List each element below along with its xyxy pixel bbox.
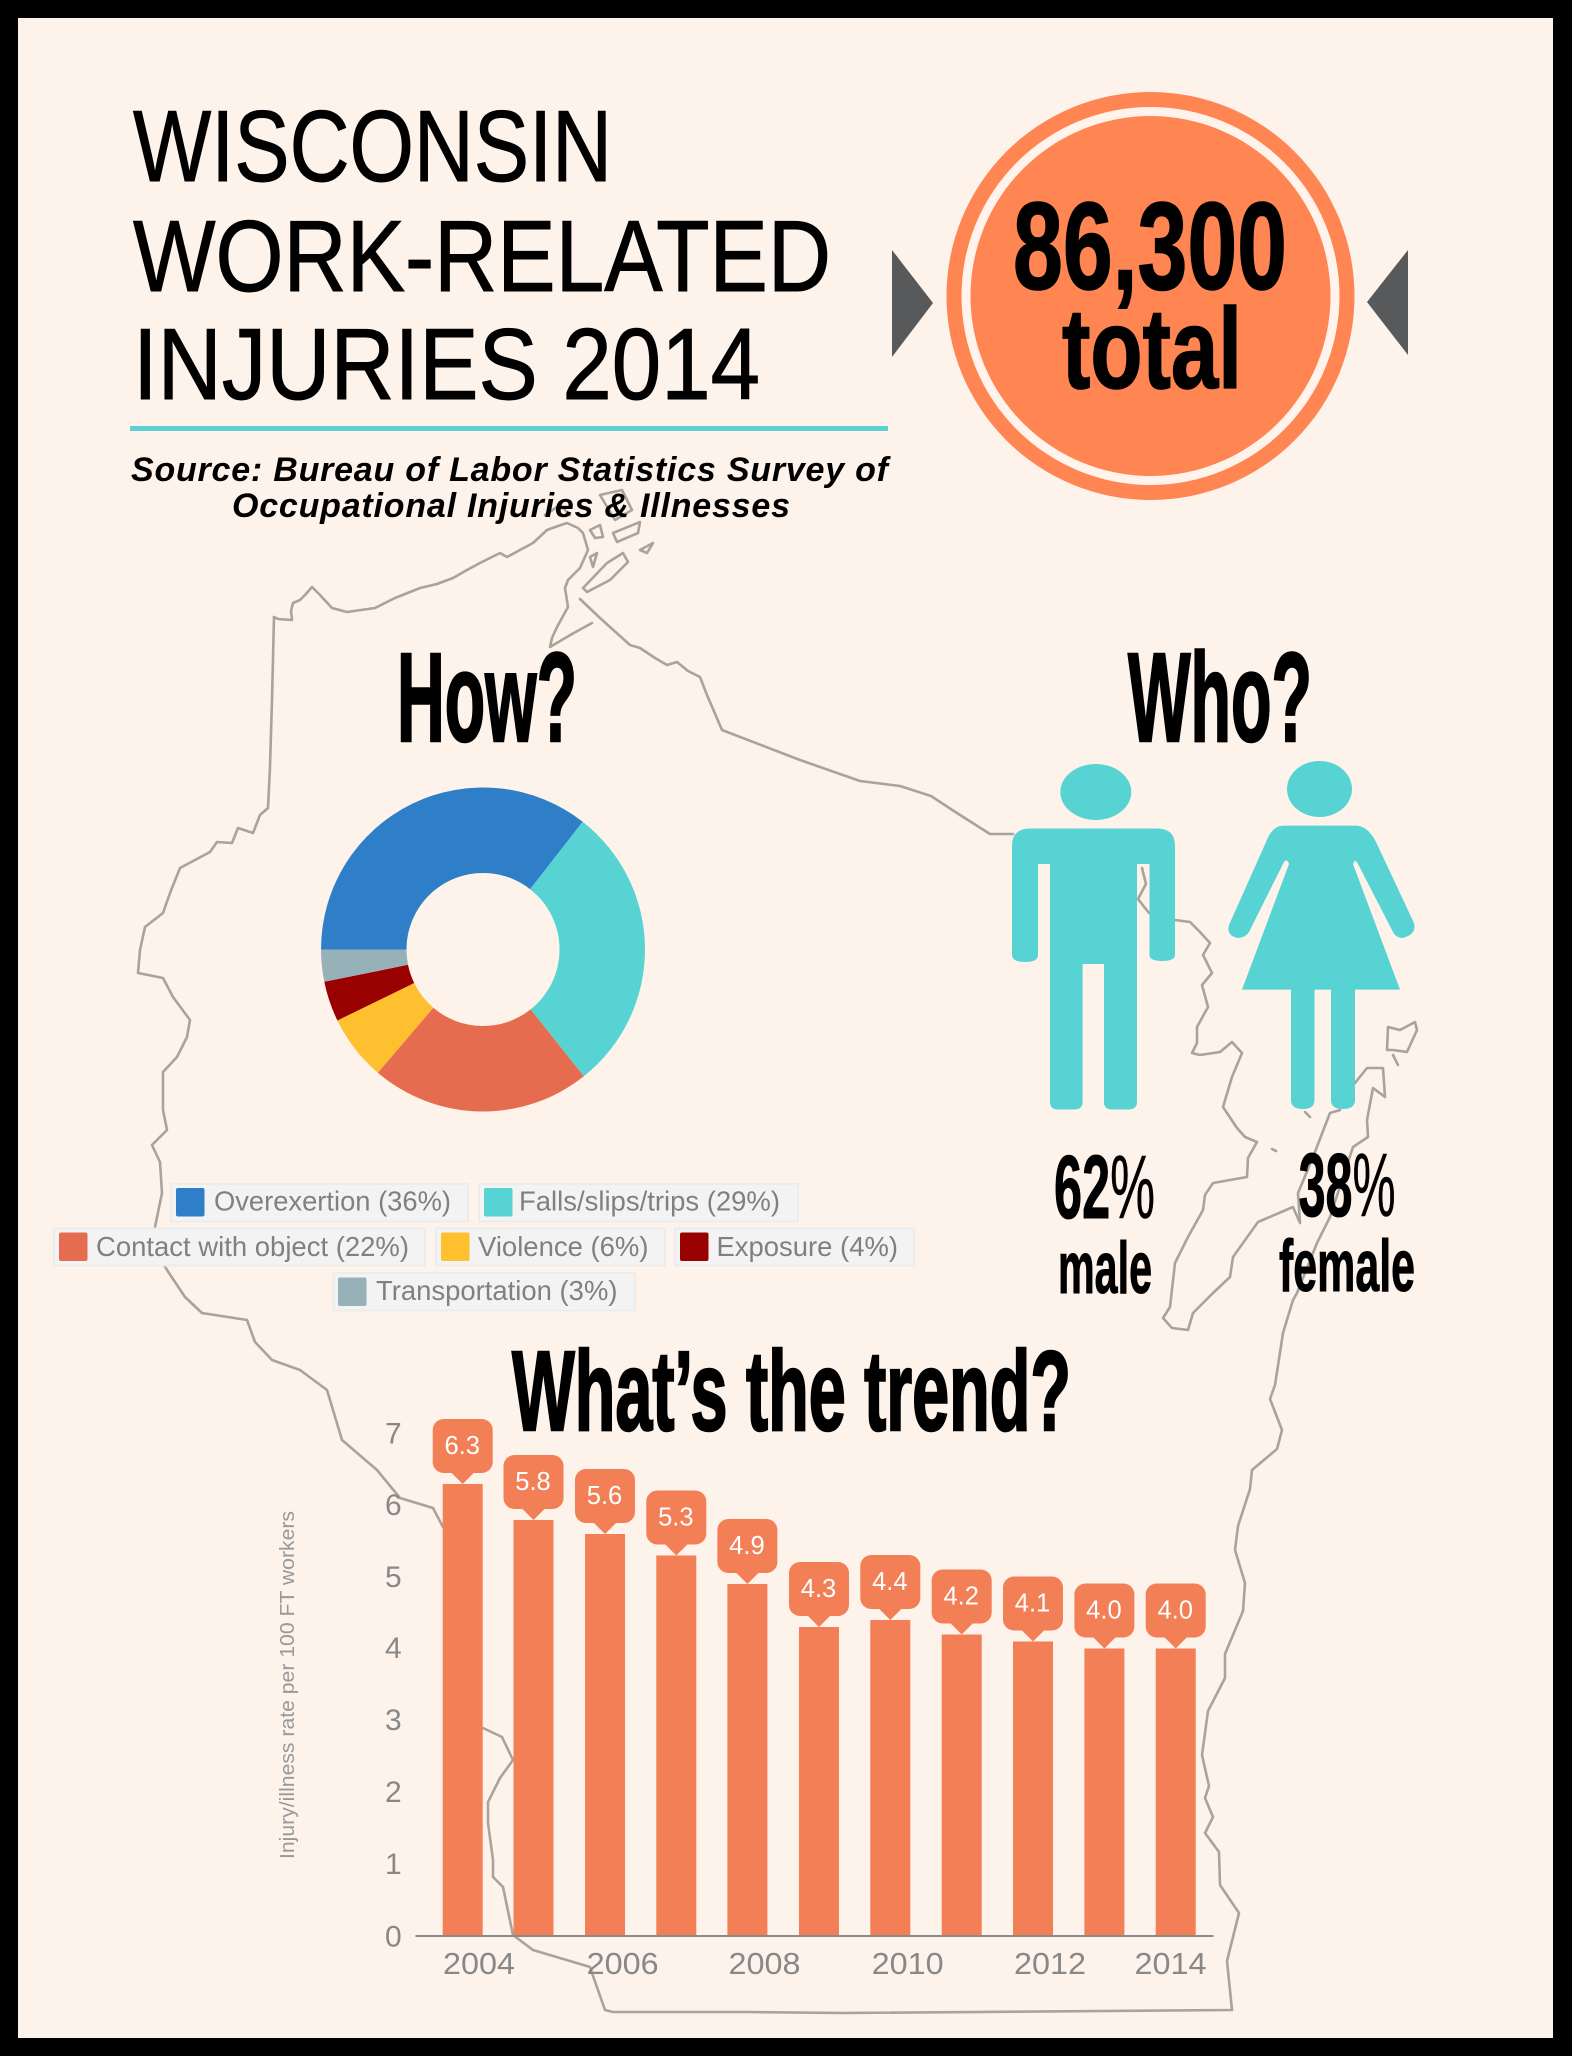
legend: Transportation (3%)	[376, 1275, 618, 1306]
y axis labels	[385, 1418, 402, 1954]
stat: 62% male: 62%	[1054, 1138, 1155, 1238]
source text	[131, 451, 892, 525]
y axis labels: 2	[385, 1776, 402, 1809]
source text: Source: Bureau of Labor Statistics Survey of	[131, 451, 892, 489]
map outline of Wisconsin	[138, 490, 1417, 2013]
stat: 38% female: female	[1279, 1226, 1415, 1307]
icon: male figure	[1012, 764, 1175, 1110]
legend	[54, 1184, 914, 1310]
y axis labels: 7	[385, 1418, 402, 1450]
y axis labels: 0	[385, 1920, 402, 1954]
panel: who	[1012, 627, 1415, 1309]
x axis labels	[443, 1946, 1206, 1981]
x axis labels: 2012	[1014, 1946, 1086, 1981]
panel: trend	[276, 1328, 1214, 1981]
x axis labels: 2008	[728, 1946, 800, 1981]
value callouts: 4.0	[1086, 1596, 1122, 1624]
panel: how	[54, 627, 914, 1310]
value callouts: 4.3	[801, 1575, 836, 1603]
heading: Who?: Who?	[1128, 627, 1312, 768]
total badge: total	[1062, 286, 1242, 413]
title: WORK-RELATED	[133, 201, 831, 313]
value callouts: 6.3	[444, 1432, 480, 1460]
x axis labels: 2004	[443, 1946, 515, 1981]
icon: female figure	[1228, 761, 1415, 1109]
value callouts: 4.0	[1157, 1596, 1193, 1624]
value callouts: 4.4	[872, 1568, 908, 1596]
value callouts: 5.6	[587, 1482, 622, 1510]
arrow: right pointer	[1367, 250, 1408, 355]
y axis labels: 6	[385, 1489, 402, 1522]
donut chart	[321, 787, 645, 1111]
y axis title: Injury/illness rate per 100 FT workers	[276, 1511, 299, 1859]
value callouts: 5.3	[658, 1504, 694, 1532]
value callouts: 4.2	[943, 1582, 979, 1610]
legend: Falls/slips/trips (29%)	[519, 1186, 780, 1216]
heading: What's the trend?: What’s the trend?	[512, 1328, 1071, 1454]
y axis labels: 3	[385, 1704, 402, 1737]
heading: How?: How?	[397, 627, 577, 768]
value callouts: 4.9	[729, 1532, 765, 1560]
legend: Exposure (4%)	[716, 1231, 898, 1262]
x axis line	[416, 1935, 1214, 1937]
total badge	[946, 92, 1354, 500]
value callouts: 4.1	[1015, 1590, 1050, 1618]
x axis labels: 2014	[1134, 1946, 1206, 1981]
legend: Contact with object (22%)	[96, 1231, 409, 1262]
x axis labels: 2010	[872, 1946, 944, 1981]
legend: Violence (6%)	[478, 1231, 648, 1262]
x axis labels: 2006	[587, 1946, 659, 1981]
title underline	[130, 426, 888, 431]
total badge: 86,300	[1013, 178, 1287, 316]
source text: Occupational Injuries & Illnesses	[232, 487, 790, 525]
title	[133, 91, 831, 421]
stat: 62% male	[1054, 1138, 1155, 1309]
legend: Overexertion (36%)	[214, 1186, 451, 1216]
title: INJURIES 2014	[133, 309, 760, 421]
title: WISCONSIN	[133, 91, 612, 203]
stat: 38% female: 38%	[1299, 1136, 1396, 1236]
stat: 62% male: male	[1058, 1228, 1152, 1309]
value callouts: 5.8	[515, 1468, 551, 1496]
bar chart	[443, 1484, 1196, 1936]
stat: 38% female	[1279, 1136, 1415, 1307]
arrow: left pointer	[892, 250, 933, 357]
y axis labels: 1	[385, 1848, 402, 1881]
y axis labels: 5	[385, 1561, 402, 1594]
y axis labels: 4	[385, 1632, 402, 1665]
value callouts	[433, 1419, 1206, 1648]
